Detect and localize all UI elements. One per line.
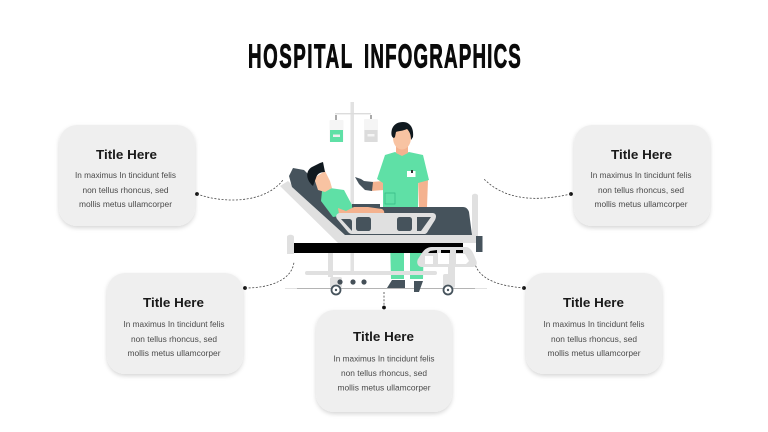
text: center card: mollis metus ullamcorper <box>338 382 431 392</box>
title: HOSPITAL <box>248 37 352 75</box>
patient <box>307 162 384 220</box>
doctor <box>355 122 429 292</box>
text: lower left card: In maximus In tincidunt felis <box>124 319 224 329</box>
title: INFOGRAPHICS <box>364 37 521 75</box>
connector: lower right <box>475 264 526 290</box>
lower side rail <box>417 247 477 267</box>
panel: lower left card <box>107 273 243 374</box>
text: top right card: non tellus rhoncus, sed <box>598 185 684 195</box>
text: top left card: In maximus In tincidunt felis <box>75 170 176 180</box>
panel: top right card <box>574 125 710 226</box>
heading: lower right card: Title Here <box>563 295 624 310</box>
text: lower right card: non tellus rhoncus, sed <box>551 334 637 344</box>
connector: top right <box>484 179 573 198</box>
heading: center card: Title Here <box>353 329 414 344</box>
text: center card: In maximus In tincidunt felis <box>334 354 434 364</box>
text: top left card: non tellus rhoncus, sed <box>82 185 169 195</box>
title <box>248 37 521 75</box>
heading: top left card: Title Here <box>96 147 157 162</box>
icon: IV pole and bags <box>330 102 378 274</box>
panel: top left card <box>59 125 195 226</box>
text: top right card: In maximus In tincidunt felis <box>590 170 692 180</box>
panel: lower right card <box>526 273 662 374</box>
connector: lower left <box>243 262 294 290</box>
bed rails <box>336 213 477 267</box>
connector: center <box>382 292 386 309</box>
text: lower right card: mollis metus ullamcorper <box>548 348 641 358</box>
text: lower right card: In maximus In tincidunt felis <box>544 319 644 329</box>
illustration: hospital bed scene <box>280 102 487 294</box>
text: lower left card: mollis metus ullamcorper <box>128 348 221 358</box>
text: top right card: mollis metus ullamcorper <box>594 199 688 209</box>
text: lower left card: non tellus rhoncus, sed <box>131 334 217 344</box>
heading: top right card: Title Here <box>611 147 672 162</box>
upper side rail <box>336 213 436 234</box>
floor line <box>285 288 487 290</box>
text: center card: non tellus rhoncus, sed <box>341 368 427 378</box>
heading: lower left card: Title Here <box>143 295 204 310</box>
bed <box>280 168 482 294</box>
text: top left card: mollis metus ullamcorper <box>79 199 172 209</box>
panel: center card <box>316 310 452 412</box>
connector: top left <box>195 180 283 200</box>
